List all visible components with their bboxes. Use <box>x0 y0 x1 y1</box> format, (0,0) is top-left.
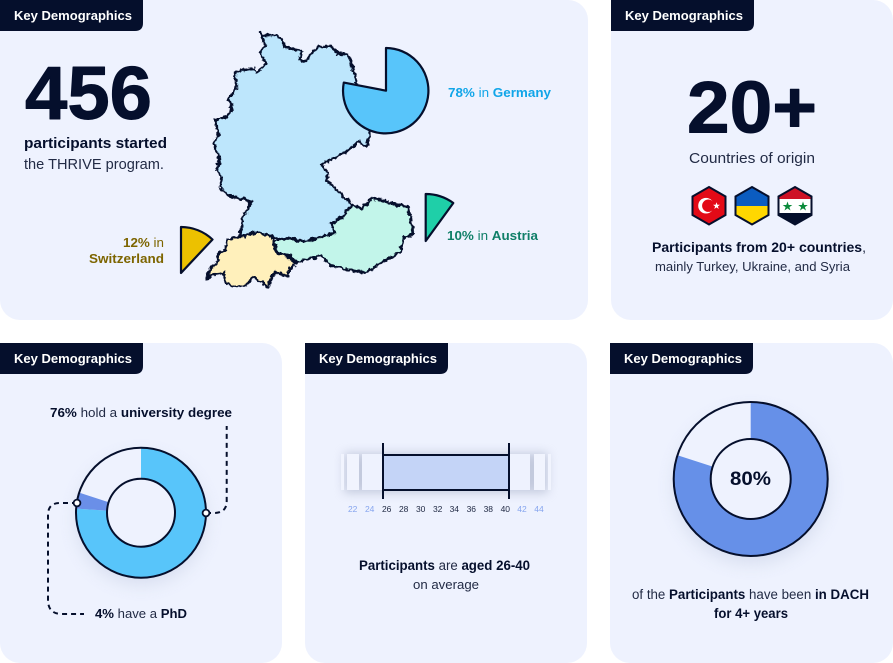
tab heading: countries panel: Key Demographics <box>625 8 743 23</box>
DACH description: of the Participants have been in DACH <box>632 587 869 602</box>
donut chart: 80% <box>674 402 828 563</box>
tab heading: map panel <box>0 0 143 31</box>
pie: Switzerland 12% <box>181 227 212 273</box>
tab heading: education panel: Key Demographics <box>14 351 132 366</box>
age axis labels: 42 <box>517 504 527 514</box>
age axis labels: 34 <box>450 504 459 514</box>
DACH description: for 4+ years <box>714 606 788 621</box>
label: Switzerland: Switzerland <box>89 251 164 266</box>
age range chart <box>341 443 551 499</box>
tab heading: age panel <box>305 343 448 374</box>
age axis labels: 28 <box>399 504 409 514</box>
icon: Ukraine flag <box>735 186 769 226</box>
pie: Germany 78% <box>343 48 428 133</box>
leader line: PhD <box>48 503 84 614</box>
age axis labels: 36 <box>467 504 476 514</box>
label: university degree: 76% hold a university degree <box>50 405 232 420</box>
donut chart: education <box>76 448 206 584</box>
participants text <box>24 135 167 173</box>
countries description: mainly Turkey, Ukraine, and Syria <box>655 259 851 274</box>
age axis labels: 38 <box>484 504 493 514</box>
age axis labels: 32 <box>433 504 443 514</box>
panel: age <box>305 343 587 663</box>
label: Switzerland <box>89 235 164 266</box>
tab heading: map panel: Key Demographics <box>14 8 132 23</box>
countries description: Participants from 20+ countries , <box>652 240 866 255</box>
label: Austria: 10% in Austria <box>447 228 539 243</box>
age axis labels: 30 <box>416 504 426 514</box>
label: Germany: 78% in Germany <box>448 85 552 100</box>
tab heading: DACH panel <box>610 343 753 374</box>
pie: Austria 10% <box>426 194 453 241</box>
tab heading: age panel: Key Demographics <box>319 351 437 366</box>
age axis labels <box>348 504 544 514</box>
tab heading: countries panel <box>611 0 754 31</box>
marker: university degree <box>203 510 209 516</box>
participants text: participants started <box>24 135 167 152</box>
countries caption: Countries of origin <box>689 150 815 167</box>
donut chart: 80%: 80% <box>730 469 771 490</box>
age description: Participants are aged 26-40 <box>359 558 530 573</box>
panel: education <box>0 343 282 663</box>
panel: participants and map <box>0 0 588 320</box>
tab heading: education panel <box>0 343 143 374</box>
age description: on average <box>413 577 479 592</box>
label: PhD: 4% have a PhD <box>95 606 187 621</box>
map: Germany, Austria, Switzerland <box>207 32 413 288</box>
DACH description <box>632 587 869 621</box>
participants text: the THRIVE program. <box>24 156 164 173</box>
map region: Austria <box>273 198 413 273</box>
panel: countries of origin <box>611 0 893 320</box>
map region: Switzerland <box>207 232 296 288</box>
countries description <box>652 240 866 274</box>
icon: Turkey flag <box>692 186 726 226</box>
age axis labels: 22 <box>348 504 358 514</box>
map region: Germany <box>213 32 370 242</box>
marker: PhD <box>74 500 80 506</box>
leader line: university degree <box>206 426 227 513</box>
age axis labels: 24 <box>365 504 375 514</box>
age description <box>359 558 530 592</box>
big number 456: 456 <box>25 51 152 135</box>
tab heading: DACH panel: Key Demographics <box>624 351 742 366</box>
panel: time in DACH <box>610 343 893 663</box>
icon: Syria flag <box>778 186 812 226</box>
age axis labels: 44 <box>534 504 544 514</box>
big number 20+: 20+ <box>687 68 817 148</box>
age axis labels: 26 <box>382 504 392 514</box>
age axis labels: 40 <box>501 504 510 514</box>
label: Switzerland: 12% in <box>123 235 164 250</box>
